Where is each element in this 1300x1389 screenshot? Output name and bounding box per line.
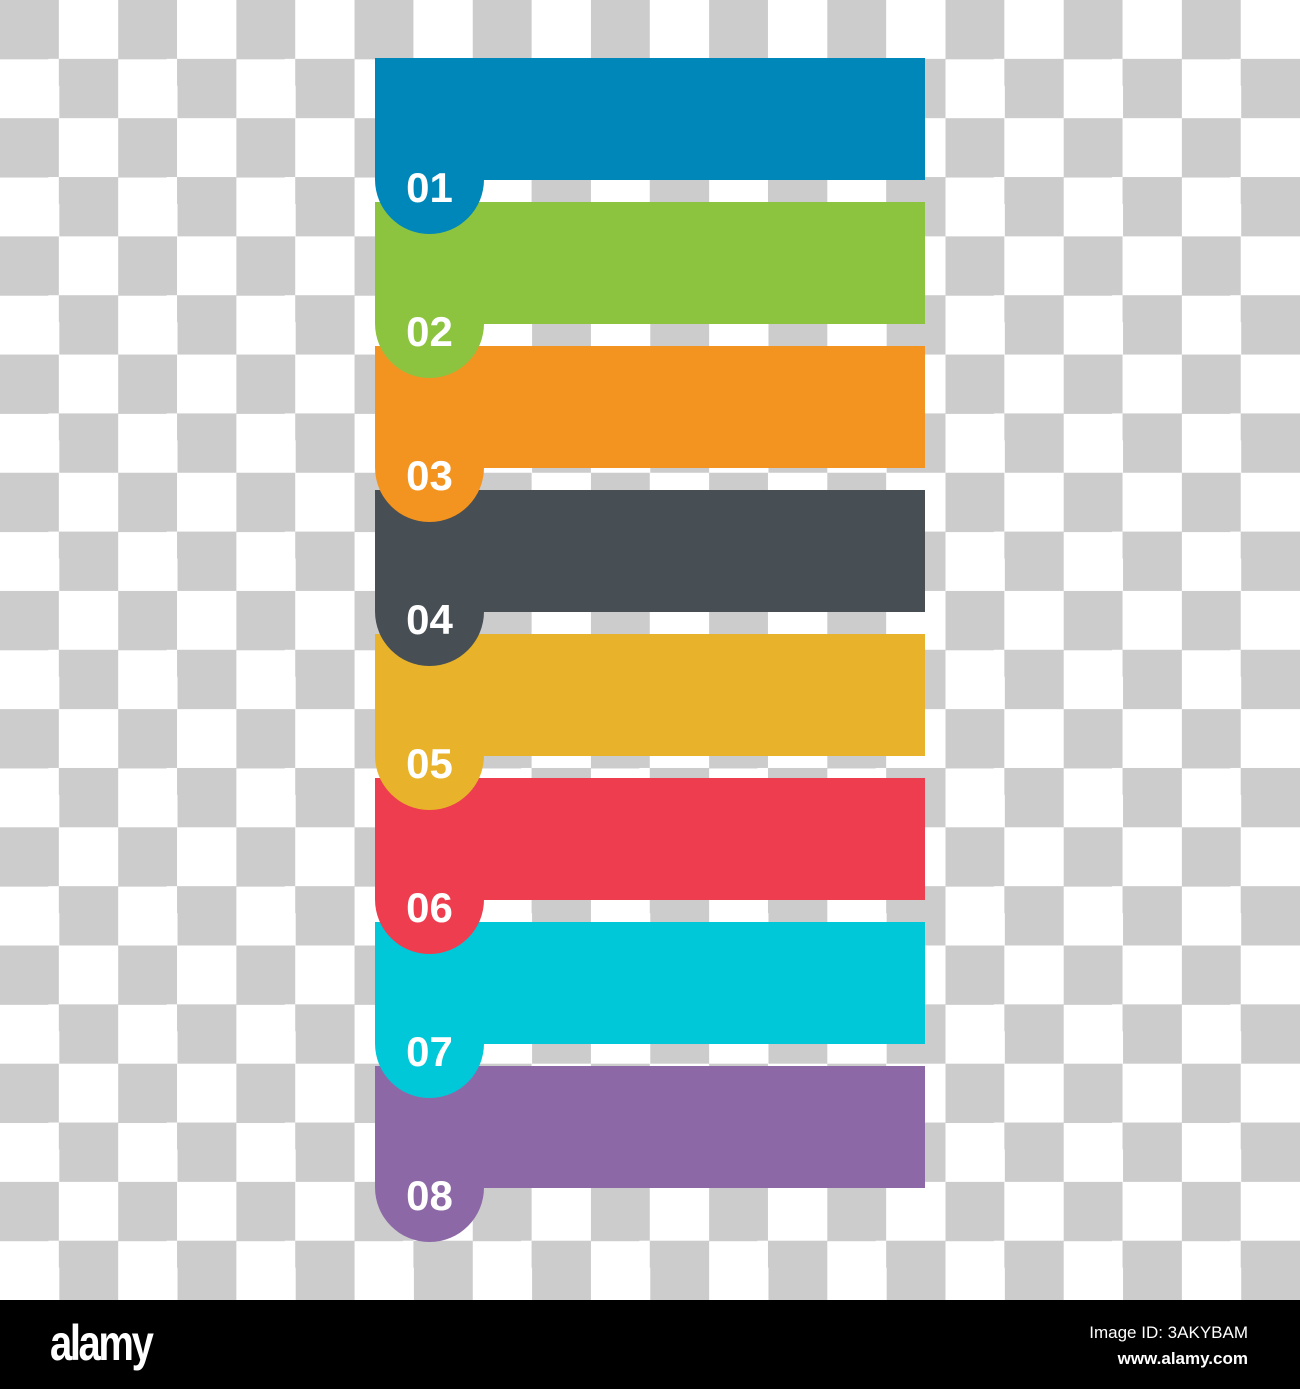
image id xyxy=(1089,1323,1248,1368)
tab 08: 08 xyxy=(406,1172,453,1219)
tab 05: 05 xyxy=(406,740,453,787)
tab 07: 07 xyxy=(406,1028,453,1075)
tab 02 xyxy=(375,202,484,378)
step 06 xyxy=(375,778,925,954)
tab 04 xyxy=(375,490,484,666)
tab 02: 02 xyxy=(406,308,453,355)
step 07 xyxy=(375,922,925,1098)
tab 07 xyxy=(375,922,484,1098)
step 02 xyxy=(375,202,925,378)
step 01 xyxy=(375,58,925,234)
tab 03 xyxy=(375,346,484,522)
tab 01 xyxy=(375,58,484,234)
step 05 xyxy=(375,634,925,810)
step 04 xyxy=(375,490,925,666)
tab 06: 06 xyxy=(406,884,453,931)
step 03 xyxy=(375,346,925,522)
tab 05 xyxy=(375,634,484,810)
tab 08 xyxy=(375,1066,484,1242)
tab 04: 04 xyxy=(406,596,453,643)
tab 03: 03 xyxy=(406,452,453,499)
image id: www.alamy.com xyxy=(1118,1349,1248,1368)
tab 01: 01 xyxy=(406,164,453,211)
logo: alamy xyxy=(50,1315,151,1371)
step 08 xyxy=(375,1066,925,1242)
footer xyxy=(0,1300,1300,1389)
image id: Image ID: 3AKYBAM xyxy=(1089,1323,1248,1342)
tab 06 xyxy=(375,778,484,954)
